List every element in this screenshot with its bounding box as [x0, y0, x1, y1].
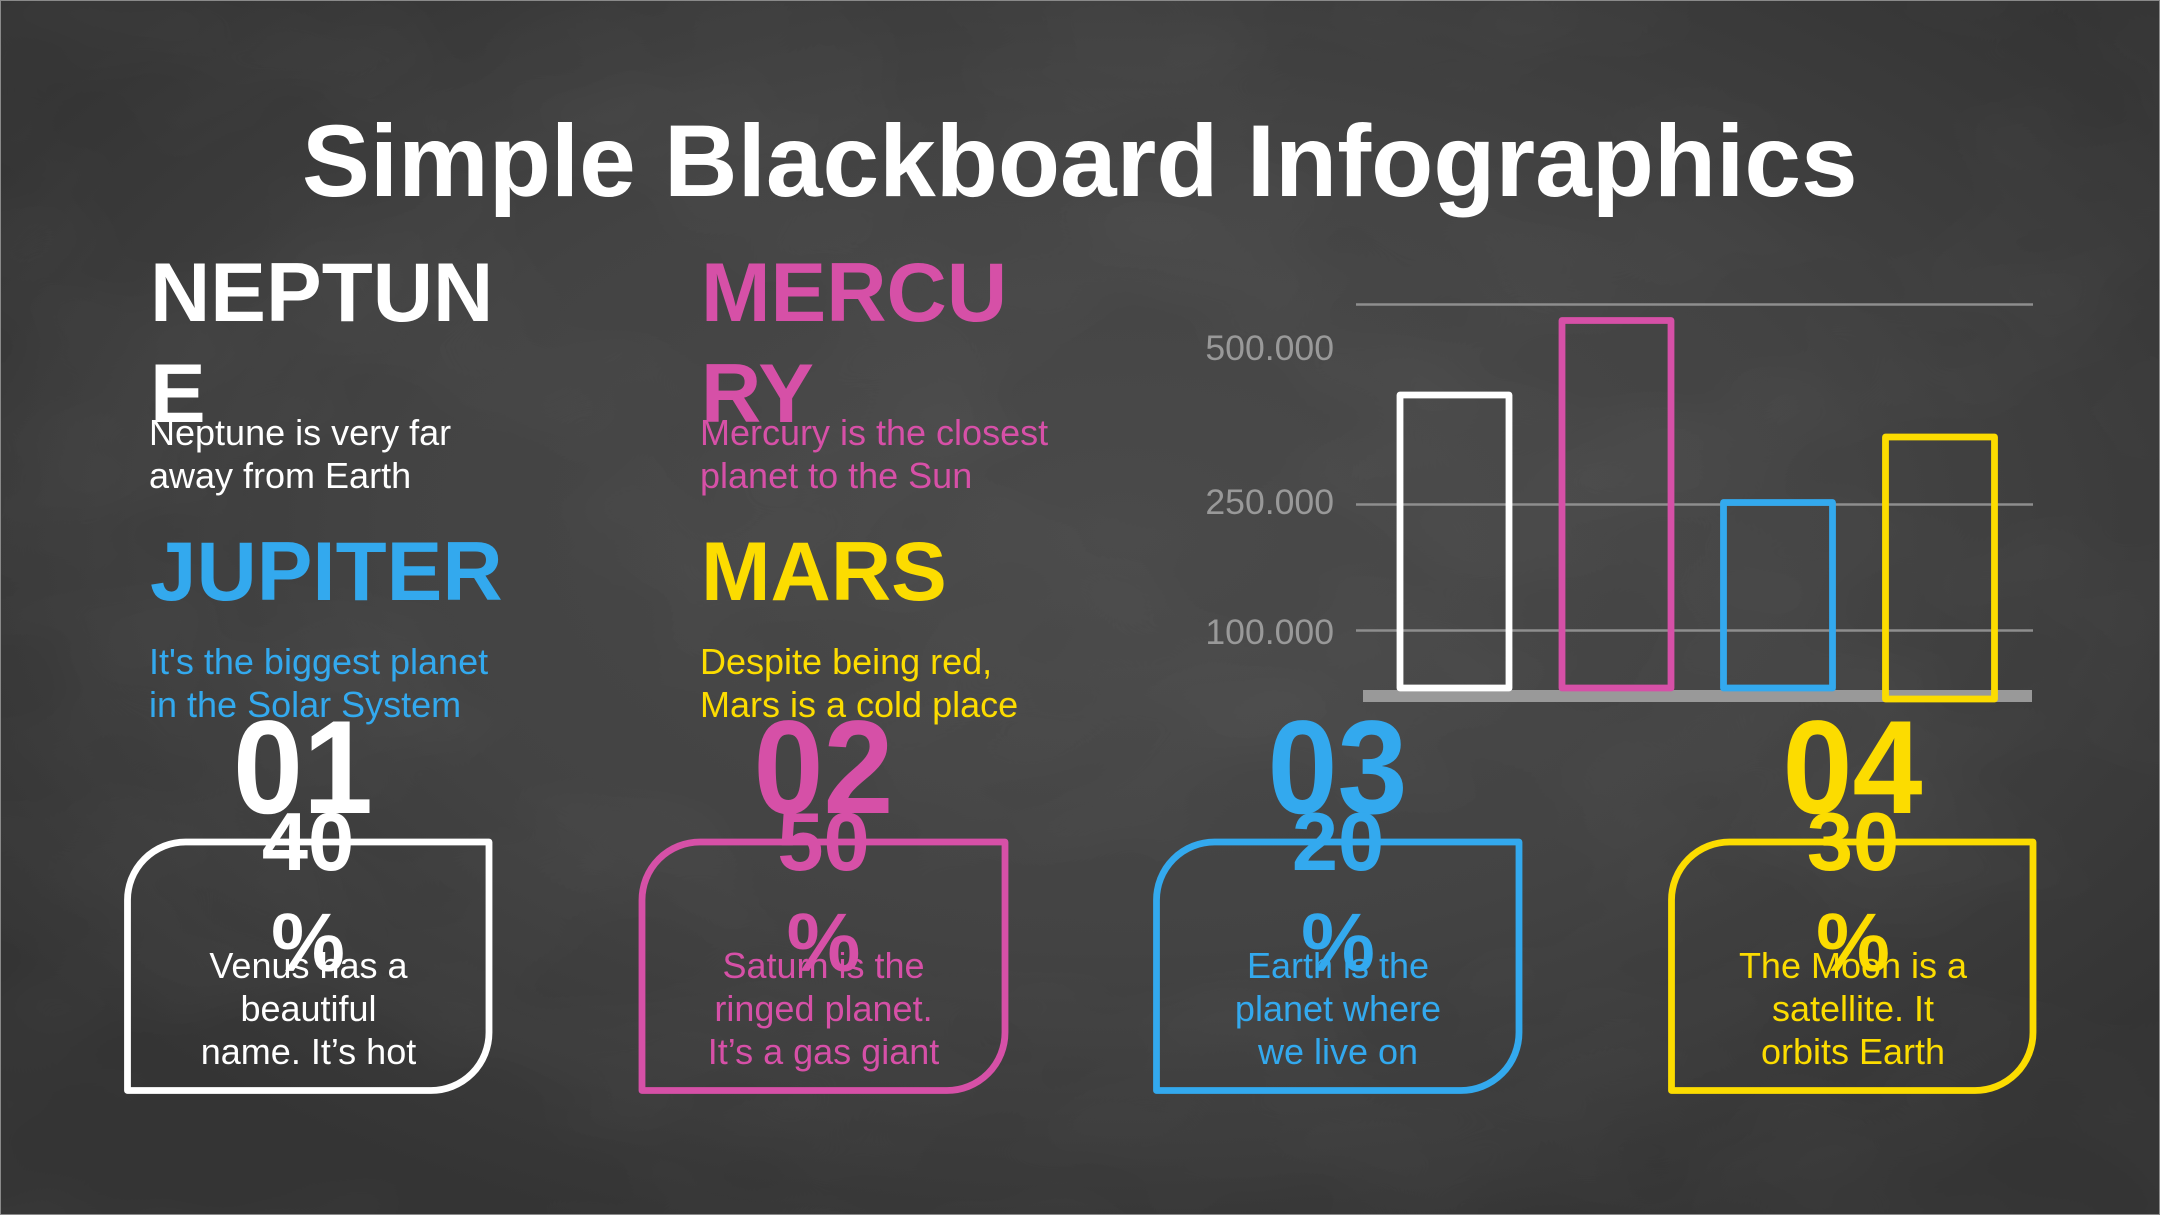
description: Earth is the	[1247, 945, 1429, 986]
description: ringed planet.	[714, 988, 933, 1029]
title: Simple Blackboard Infographics	[302, 104, 1858, 218]
text: Jupiter description: in the Solar System	[149, 684, 461, 725]
axis labels: 250.000	[1205, 482, 1334, 522]
heading: Mercury: RY	[701, 346, 814, 440]
percentage: 50	[777, 795, 870, 888]
outlined box	[642, 842, 1005, 1090]
percentage: 40	[262, 795, 354, 888]
bar: white	[1400, 395, 1509, 688]
bar: pink	[1562, 320, 1671, 688]
text: Neptune description: Neptune is very far	[149, 412, 451, 453]
description: planet where	[1235, 988, 1441, 1029]
axis labels: 500.000	[1205, 328, 1334, 368]
panel: Jupiter	[149, 524, 503, 725]
heading: Mercury: MERCU	[701, 245, 1007, 339]
description: Venus has a	[209, 945, 409, 986]
panel: Mars	[700, 524, 1018, 725]
card 01	[128, 694, 489, 1090]
text: Mars description: Mars is a cold place	[700, 684, 1018, 725]
description: beautiful	[240, 988, 377, 1029]
text: Mars description: Despite being red,	[700, 641, 992, 682]
text: Neptune description: away from Earth	[149, 455, 411, 496]
description: satellite. It	[1772, 988, 1934, 1029]
heading: Neptune: NEPTUN	[150, 245, 493, 339]
number: 02	[754, 694, 894, 842]
percentage: %	[1301, 896, 1375, 989]
bar chart	[1205, 304, 2033, 702]
bar: blue	[1724, 502, 1832, 688]
number: 03	[1268, 694, 1408, 842]
number: 04	[1782, 694, 1923, 842]
baseline	[1363, 690, 2032, 702]
percentage: 20	[1292, 795, 1384, 888]
text: Mercury description: Mercury is the closest	[700, 412, 1048, 453]
panel: Mercury	[700, 245, 1048, 496]
outlined box	[128, 842, 489, 1090]
panel: Neptune	[149, 245, 493, 496]
heading: Jupiter: JUPITER	[150, 524, 503, 618]
bar: yellow	[1886, 437, 1994, 699]
outlined box	[1156, 842, 1519, 1090]
description: orbits Earth	[1761, 1031, 1945, 1072]
description: Saturn is the	[722, 945, 925, 986]
percentage: %	[1816, 896, 1890, 989]
axis labels	[1205, 328, 1334, 652]
card 04	[1672, 694, 2033, 1090]
text: Jupiter description: It's the biggest planet	[149, 641, 488, 682]
card 03	[1156, 694, 1519, 1090]
number: 01	[233, 694, 373, 842]
description: name. It’s hot	[201, 1031, 416, 1072]
percentage: %	[787, 896, 860, 989]
outlined box	[1672, 842, 2033, 1090]
card 02	[642, 694, 1005, 1090]
percentage: 30	[1807, 795, 1899, 888]
axis labels: 100.000	[1205, 612, 1334, 652]
heading: Neptune: E	[150, 346, 206, 440]
description: The Moon is a	[1739, 945, 1968, 986]
description: we live on	[1257, 1031, 1418, 1072]
text: Mercury description: planet to the Sun	[700, 455, 972, 496]
heading: Mars: MARS	[701, 524, 947, 618]
description: It’s a gas giant	[708, 1031, 939, 1072]
percentage: %	[271, 896, 345, 989]
